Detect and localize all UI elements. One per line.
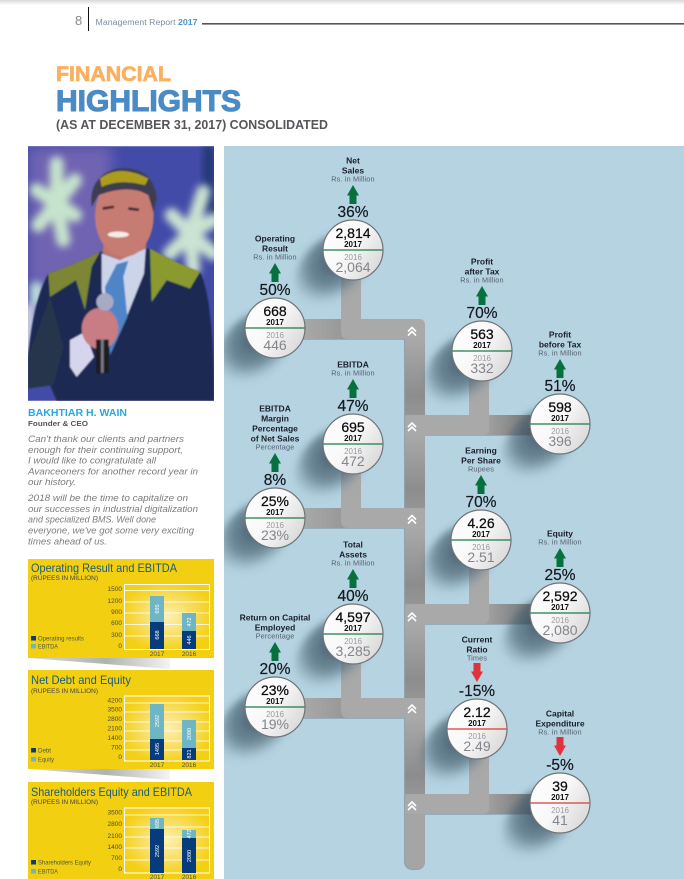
chart panel: Shareholders Equity and EBITDA: 2080 <box>187 850 193 862</box>
metric: Net Sales: 2017 <box>344 240 362 249</box>
metric: Return on Capital Employed: 2017 <box>266 697 284 706</box>
quote text: our successes in industrial digitalization <box>28 504 198 514</box>
name and role: BAKHTIAR H. WAIN <box>28 407 127 419</box>
chart panel: Operating Result and EBITDA: 668 <box>155 630 161 640</box>
metric: Total Assets: 40% <box>337 588 369 605</box>
title <box>56 63 328 132</box>
metric: EBITDA Margin Percentage of Net Sales: Margin <box>261 414 289 424</box>
metric: Earning Per Share: 2.51 <box>467 549 495 565</box>
metric: Net Sales: Net <box>346 156 360 166</box>
metric: Return on Capital Employed <box>240 612 310 737</box>
chart panel: Net Debt and Equity: 2017 <box>150 762 165 769</box>
metric: Operating Result: 2017 <box>266 318 284 327</box>
metric: EBITDA Margin Percentage of Net Sales: 23% <box>261 527 289 543</box>
chart panel: Net Debt and Equity: 2592 <box>155 715 161 727</box>
metric: Equity: 2016 <box>551 616 569 625</box>
metric: Equity: Equity <box>547 528 573 538</box>
quote text: and specialized BMS. Well done <box>28 514 156 524</box>
chart panel: Operating Result and EBITDA: 1200 <box>108 598 122 605</box>
metric: EBITDA Margin Percentage of Net Sales: Percentage <box>252 424 298 434</box>
chart panel: Net Debt and Equity: Debt <box>38 748 51 754</box>
metric: Operating Result: Result <box>262 244 288 254</box>
metric: Current Ratio: 2.12 <box>463 704 491 720</box>
long shadows cast by metric circles <box>224 232 570 856</box>
chart panel: Operating Result and EBITDA: 2016 <box>182 651 197 658</box>
metric: Return on Capital Employed: 20% <box>259 661 291 678</box>
metric: Net Sales: Sales <box>342 166 364 176</box>
quote text: Can't thank our clients and partners <box>28 434 185 444</box>
chart panel: Operating Result and EBITDA: 2017 <box>150 651 165 658</box>
page header: 8 <box>75 13 82 28</box>
metric: Capital Expenditure: 41 <box>552 812 568 828</box>
metric: Profit after Tax: 332 <box>470 360 494 376</box>
quote text: enough for their continuing support, <box>28 445 183 455</box>
metric: Current Ratio: Current <box>462 634 493 644</box>
metric: Total Assets: 2017 <box>344 624 362 633</box>
metric: Earning Per Share: 2016 <box>472 543 490 552</box>
metric: EBITDA Margin Percentage of Net Sales: 2016 <box>266 521 284 530</box>
chart panel: Operating Result and EBITDA: 695 <box>155 604 161 614</box>
metric: Capital Expenditure: -5% <box>546 757 574 774</box>
metric: Capital Expenditure: Expenditure <box>535 718 585 728</box>
chart panel: Net Debt and Equity: 2080 <box>187 728 193 740</box>
chart panel: Shareholders Equity and EBITDA: 1400 <box>108 844 122 851</box>
metric: EBITDA: Rs. in Million <box>331 368 375 378</box>
pipe network <box>300 250 540 870</box>
metric: Profit before Tax: before Tax <box>539 340 581 350</box>
metric: EBITDA Margin Percentage of Net Sales: 8% <box>264 472 286 489</box>
chart panel: Net Debt and Equity: 4200 <box>108 698 122 704</box>
chart panel: Operating Result and EBITDA: 300 <box>111 632 122 639</box>
metric: Net Sales: 2,814 <box>335 225 371 241</box>
chart panel: Net Debt and Equity: 2016 <box>182 762 197 769</box>
metric: Earning Per Share <box>451 446 511 570</box>
metric: Total Assets <box>323 540 383 664</box>
chart panel: Net Debt and Equity: 700 <box>111 744 122 752</box>
metric: Total Assets: Rs. in Million <box>331 558 375 568</box>
metric: EBITDA Margin Percentage of Net Sales: Percentage <box>256 442 294 452</box>
metric: Profit after Tax: Profit <box>471 256 493 266</box>
metric: Current Ratio <box>447 634 507 759</box>
metric: Return on Capital Employed: Percentage <box>256 632 294 640</box>
metric: Total Assets: 2016 <box>344 637 362 646</box>
metric: Current Ratio: 2017 <box>468 719 486 728</box>
metric: Operating Result: 50% <box>259 282 291 299</box>
metric: Current Ratio: Ratio <box>466 644 488 654</box>
metric: Net Sales: 2,064 <box>335 259 371 275</box>
metric: Earning Per Share: 4.26 <box>467 515 495 531</box>
metric: Profit before Tax: 2016 <box>551 427 569 436</box>
metric: EBITDA Margin Percentage of Net Sales: 2017 <box>266 508 284 517</box>
metric: EBITDA: 2017 <box>344 434 362 443</box>
metric: EBITDA Margin Percentage of Net Sales <box>245 404 305 548</box>
metric: Capital Expenditure <box>530 708 590 833</box>
metric: Operating Result: Rs. in Million <box>253 252 297 262</box>
metric: Operating Result: Operating <box>255 234 295 244</box>
quote text: everyone, we've got some very exciting <box>28 526 194 536</box>
chart panel: Net Debt and Equity: 1495 <box>155 743 161 755</box>
chart panel: Operating Result and EBITDA: 600 <box>111 620 122 627</box>
chart panel: Net Debt and Equity: 2100 <box>108 726 122 732</box>
metric: Current Ratio: -15% <box>459 683 495 700</box>
chart panel: Shareholders Equity and EBITDA: (RUPEES IN MILLION) <box>31 800 98 806</box>
chart panel: Shareholders Equity and EBITDA: 695 <box>155 819 161 828</box>
metric: Profit after Tax: Rs. in Million <box>460 276 504 284</box>
chart panel: Net Debt and Equity: 2800 <box>108 716 122 723</box>
metric: Profit before Tax: 2017 <box>551 414 569 423</box>
metric: Equity: 2,592 <box>542 588 578 604</box>
chart panel: Shareholders Equity and EBITDA: EBITDA <box>38 870 58 876</box>
chart panel: Net Debt and Equity: Equity <box>38 758 54 764</box>
metric: Total Assets: 4,597 <box>335 609 371 625</box>
metric: Return on Capital Employed: 23% <box>261 682 289 698</box>
chart panel: Operating Result and EBITDA: 472 <box>187 617 193 627</box>
chart panel: Shareholders Equity and EBITDA: Shareholders Equity and EBITDA <box>31 785 192 799</box>
chart panel: Net Debt and Equity <box>28 670 214 780</box>
metric: Earning Per Share: 2017 <box>472 530 490 539</box>
metric: Capital Expenditure: Rs. in Million <box>538 728 582 736</box>
metric: EBITDA Margin Percentage of Net Sales: 25% <box>261 493 289 509</box>
metric: Earning Per Share: Earning <box>465 446 497 456</box>
metric: Earning Per Share: Rupees <box>468 464 494 474</box>
metric: Current Ratio: Times <box>467 654 487 662</box>
metric: Capital Expenditure: 39 <box>552 778 568 794</box>
title: HIGHLIGHTS <box>56 85 241 118</box>
name and role <box>28 407 127 428</box>
page header <box>75 7 684 31</box>
metric: Earning Per Share: 70% <box>465 494 497 511</box>
metric: EBITDA Margin Percentage of Net Sales: of Net Sales <box>251 434 300 444</box>
chart panel: Operating Result and EBITDA: Operating results <box>38 636 84 642</box>
page header: Management Report 2017 <box>96 18 198 27</box>
title: FINANCIAL <box>56 63 171 86</box>
metric: Capital Expenditure: 2016 <box>551 806 569 815</box>
metric: Profit before Tax: Rs. in Million <box>538 348 582 358</box>
metric: Total Assets: 3,285 <box>335 643 371 659</box>
chart panel: Operating Result and EBITDA: 900 <box>111 609 122 616</box>
chart panel: Operating Result and EBITDA: 1500 <box>108 586 122 593</box>
panel: blue metrics background <box>224 146 684 879</box>
metric: Profit before Tax: Profit <box>549 330 571 340</box>
chart panel: Net Debt and Equity: (RUPEES IN MILLION) <box>31 689 98 695</box>
metric: Equity <box>530 528 590 643</box>
chart panel: Shareholders Equity and EBITDA: 2100 <box>108 833 122 840</box>
metric: Operating Result: 2016 <box>266 331 284 340</box>
quote text: Avanceoners for another record year in <box>27 466 198 476</box>
metric: Total Assets: Assets <box>339 550 367 560</box>
metric: Profit after Tax: after Tax <box>465 266 500 276</box>
metric: Capital Expenditure: 2017 <box>551 793 569 802</box>
metric: EBITDA: EBITDA <box>337 360 369 370</box>
metric: Profit after Tax <box>452 256 512 381</box>
metric: Equity: 25% <box>544 567 576 584</box>
metric: Equity: Rs. in Million <box>538 538 582 546</box>
metric: Profit after Tax: 2016 <box>473 354 491 363</box>
chart panel: Shareholders Equity and EBITDA: Shareholders Equity <box>38 860 91 866</box>
metric: EBITDA: 472 <box>341 453 365 469</box>
chart panel: Operating Result and EBITDA: 446 <box>187 635 193 645</box>
chart panel: Shareholders Equity and EBITDA: 3500 <box>108 810 122 816</box>
metric: Return on Capital Employed: 19% <box>261 716 289 732</box>
metric: Equity: 2017 <box>551 603 569 612</box>
metric: Net Sales: 36% <box>337 204 369 221</box>
metric: EBITDA: 47% <box>337 398 369 415</box>
metric: Profit after Tax: 70% <box>466 305 498 322</box>
metric: Net Sales <box>323 156 383 280</box>
metric: Profit before Tax: 396 <box>548 433 572 449</box>
chart panel: Operating Result and EBITDA: 0 <box>118 643 122 650</box>
metric: EBITDA: 695 <box>341 419 365 435</box>
metric: EBITDA: 2016 <box>344 447 362 456</box>
metric: Return on Capital Employed: Return on Capital <box>240 612 310 622</box>
quote text: 2018 will be the time to capitalize on <box>27 493 188 503</box>
metric: Profit after Tax: 563 <box>470 326 494 342</box>
metric: EBITDA <box>323 360 383 474</box>
chart panel: Shareholders Equity and EBITDA: 2592 <box>155 845 161 857</box>
chart panel: Operating Result and EBITDA <box>28 559 214 669</box>
metric: Net Sales: 2016 <box>344 253 362 262</box>
metric: Equity: 2,080 <box>542 622 578 638</box>
chart panel: Shareholders Equity and EBITDA: 0 <box>118 866 122 873</box>
quote text: I would like to congratulate all <box>28 456 157 466</box>
quote text: times ahead of us. <box>28 536 107 546</box>
chart panel: Shareholders Equity and EBITDA: 2800 <box>108 821 122 828</box>
chart panel: Operating Result and EBITDA: EBITDA <box>38 644 58 650</box>
metric: Profit after Tax: 2017 <box>473 341 491 350</box>
chart panel: Operating Result and EBITDA: Operating Result and EBITDA <box>31 561 177 575</box>
chart panel: Net Debt and Equity: 0 <box>118 754 122 761</box>
metric: Profit before Tax <box>530 330 590 454</box>
chart panel: Net Debt and Equity: 1400 <box>108 735 122 742</box>
metric: Current Ratio: 2016 <box>468 732 486 741</box>
metric: Return on Capital Employed: 2016 <box>266 710 284 719</box>
chart panel: Shareholders Equity and EBITDA <box>28 782 214 879</box>
metric: Net Sales: Rs. in Million <box>331 174 375 184</box>
icons: upward chevrons on pipes <box>408 328 416 810</box>
metric: Operating Result <box>245 234 305 358</box>
quote text <box>27 434 198 546</box>
chart panel: Operating Result and EBITDA: (RUPEES IN MILLION) <box>31 576 98 582</box>
quote text: our history. <box>28 477 76 487</box>
chart panel: Net Debt and Equity: Net Debt and Equity <box>31 673 131 687</box>
metric: Capital Expenditure: Capital <box>546 708 574 718</box>
metric: Earning Per Share: Per Share <box>461 456 501 466</box>
metric: Profit before Tax: 51% <box>544 378 576 395</box>
title: (AS AT DECEMBER 31, 2017) CONSOLIDATED <box>56 117 328 132</box>
metric: EBITDA Margin Percentage of Net Sales: EBITDA <box>259 404 291 414</box>
metric: Profit before Tax: 598 <box>548 399 572 415</box>
metric: Total Assets: Total <box>343 540 363 550</box>
metric: Operating Result: 446 <box>263 337 287 353</box>
chart panel: Net Debt and Equity: 3500 <box>108 706 122 714</box>
metric: Current Ratio: 2.49 <box>463 738 491 754</box>
photo: founder speaking into microphone <box>28 146 214 401</box>
chart panel: Shareholders Equity and EBITDA: 700 <box>111 855 122 862</box>
chart panel: Net Debt and Equity: 821 <box>187 749 193 759</box>
metric: Operating Result: 668 <box>263 303 287 319</box>
metric: Return on Capital Employed: Employed <box>255 622 295 632</box>
name and role: Founder & CEO <box>28 419 88 428</box>
chart panel: Shareholders Equity and EBITDA: 472 <box>187 829 193 839</box>
